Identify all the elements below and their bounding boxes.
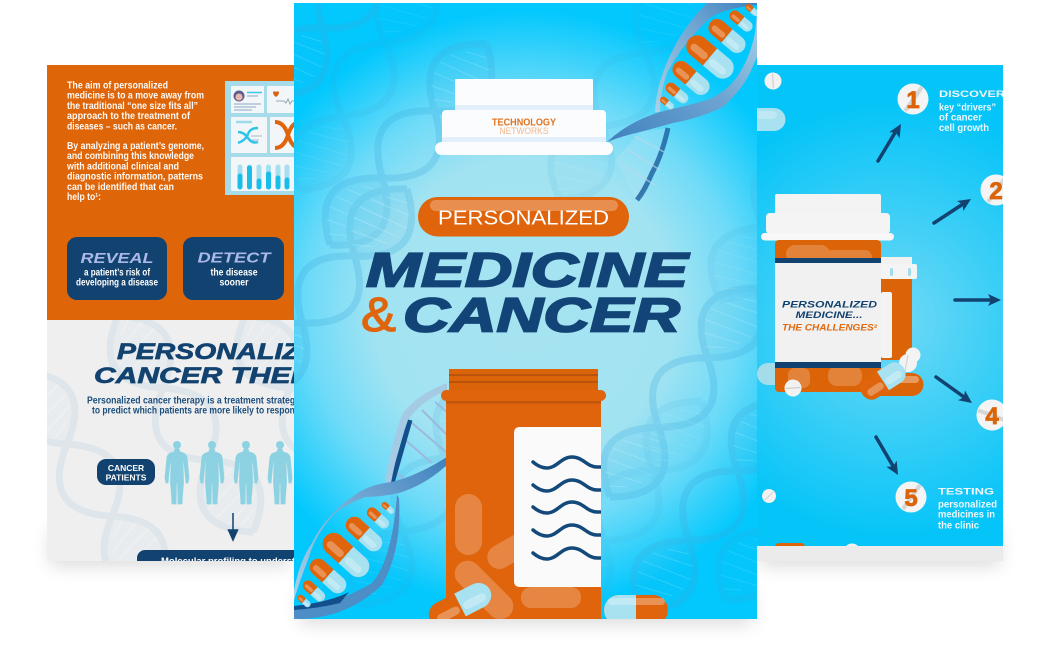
panel: left page	[47, 65, 294, 561]
arrow: to step 2	[934, 199, 971, 223]
step 2: 2	[989, 178, 1003, 205]
translucent pills in bottle	[449, 494, 581, 625]
label: cancer patients: CANCER	[108, 463, 144, 473]
dashboard illustration	[225, 81, 300, 195]
callout: reveal: developing a disease	[76, 278, 158, 288]
icon: main bottle	[761, 194, 894, 392]
step 5: testing: medicines in	[938, 508, 995, 520]
icon: DNA strand with capsules, bottom left	[294, 383, 447, 619]
title: medicine & cancer: &	[361, 289, 396, 342]
title: medicine & cancer	[361, 244, 691, 342]
callout: detect: the disease	[210, 268, 258, 278]
panel shadows	[50, 530, 1000, 624]
step 5: testing	[896, 482, 997, 532]
panel: cover page	[294, 3, 757, 619]
step 5: testing: TESTING	[938, 486, 994, 498]
title pill: personalized	[418, 197, 629, 236]
callout: reveal: REVEAL	[80, 250, 154, 267]
arrow: to step 5	[876, 437, 898, 475]
step 1: discover: key “drivers”	[939, 102, 996, 114]
heading: personalized cancer therapy: CANCER THERAPY	[94, 363, 377, 388]
text: introduction: approach to the treatment of	[67, 110, 190, 122]
box: molecular profiling	[137, 550, 294, 561]
icon: pills in front of bottle	[784, 362, 906, 400]
title: medicine & cancer: MEDICINE	[366, 244, 691, 298]
heading: challenges	[782, 301, 878, 330]
text: therapy description: to predict which patients are more likely to respond	[92, 404, 300, 416]
callout: reveal: a patient’s risk of	[84, 268, 151, 278]
text: therapy description	[88, 396, 294, 416]
text: introduction: help to¹:	[67, 191, 101, 203]
step 5: testing: 5	[904, 485, 918, 512]
step 1: discover: of cancer	[939, 112, 982, 124]
text: introduction: the traditional “one size fits all”	[67, 100, 198, 112]
icon: lower tablets	[762, 489, 858, 546]
step 2	[980, 174, 1003, 206]
arrow: down	[228, 513, 238, 540]
step 1: discover: DISCOVER	[939, 89, 1005, 100]
bottle label	[514, 427, 603, 587]
icon: tablet and capsule top-left	[757, 69, 786, 131]
text: introduction: and combining this knowledge	[67, 150, 194, 162]
label: cancer patients: PATIENTS	[106, 472, 147, 482]
capsule in front of bottle	[428, 583, 492, 619]
label: cancer patients	[97, 459, 155, 485]
heading: personalized cancer therapy: PERSONALIZED	[117, 339, 339, 364]
icon: pill bottle	[424, 369, 668, 632]
step 5: testing: personalized	[938, 498, 997, 510]
icons: patient figures	[165, 441, 292, 504]
box: molecular profiling: Molecular profiling to understand	[161, 556, 312, 567]
capsule bottom right	[604, 595, 668, 619]
callout: detect: DETECT	[198, 250, 273, 266]
text: introduction: diseases – such as cancer.	[67, 120, 177, 132]
panel: right page	[757, 65, 1012, 561]
text: introduction: The aim of personalized	[67, 80, 168, 92]
callout: detect: sooner	[220, 278, 249, 288]
icon: pills behind bottle	[757, 348, 924, 396]
step 4: 4	[985, 403, 999, 430]
text: introduction	[66, 80, 204, 203]
step 1: discover: cell growth	[939, 122, 989, 134]
heading: challenges: PERSONALIZED	[782, 300, 877, 310]
arrow: to step 4	[936, 377, 972, 403]
callout: reveal	[67, 237, 167, 300]
text: introduction: with additional clinical and	[66, 160, 179, 172]
logo: technology networks: NETWORKS	[500, 126, 548, 137]
arrow: to step 1	[878, 124, 901, 161]
callout: detect	[183, 237, 284, 300]
text: introduction: can be identified that can	[67, 181, 174, 193]
text: therapy description: Personalized cancer therapy is a treatment strategy	[87, 394, 300, 406]
background DNA pattern	[294, 3, 757, 610]
heading: challenges: THE CHALLENGES²	[782, 322, 878, 332]
text: introduction: medicine is to a move away from	[67, 90, 204, 102]
heading: challenges: MEDICINE...	[796, 310, 862, 321]
step 1: discover: 1	[906, 87, 920, 114]
icon: small bottle	[881, 257, 917, 360]
text: introduction: By analyzing a patient’s genome,	[67, 140, 204, 152]
arrow: to step 3	[955, 294, 1001, 306]
icon: DNA strand with capsules, top right	[607, 3, 760, 200]
logo: technology networks: TECHNOLOGY	[492, 116, 556, 128]
step 1: discover	[898, 84, 1005, 134]
step 4	[976, 400, 1003, 430]
logo: technology networks	[435, 79, 613, 155]
title pill: personalized: PERSONALIZED	[438, 208, 609, 230]
step 5: testing: the clinic	[938, 520, 979, 532]
title: medicine & cancer: CANCER	[403, 290, 680, 342]
text: introduction: diagnostic information, patterns	[67, 170, 203, 182]
heading: personalized cancer therapy	[95, 343, 294, 384]
